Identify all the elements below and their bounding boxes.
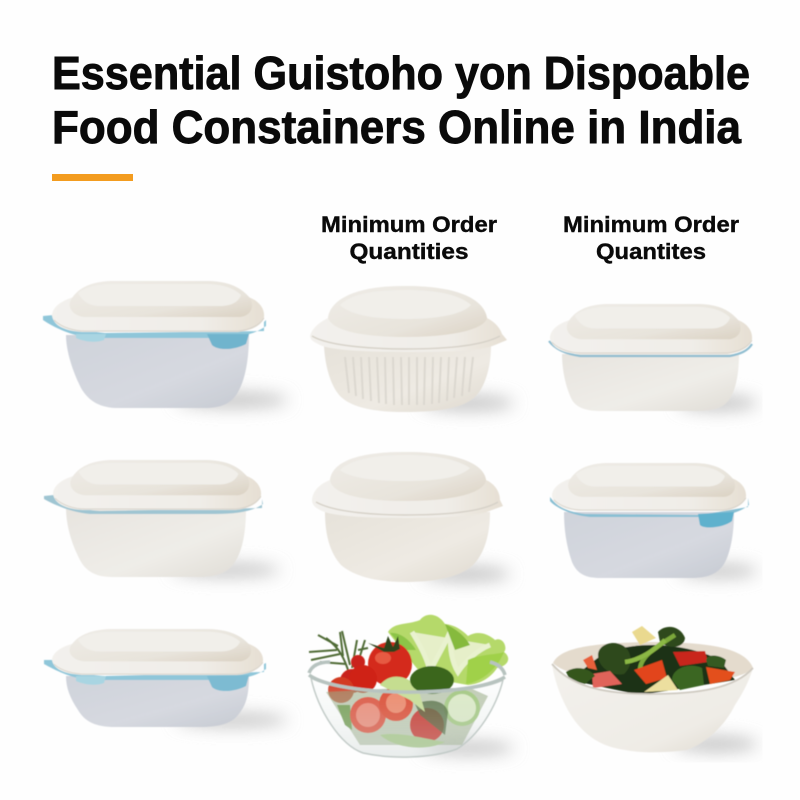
tomatoes bbox=[328, 636, 412, 703]
glass bbox=[311, 678, 503, 757]
lettuce bbox=[388, 615, 508, 685]
title bbox=[52, 47, 750, 153]
glass bowl interior vegetables bbox=[326, 666, 488, 748]
title: Essential Guistoho yon Dispoable bbox=[52, 47, 750, 99]
column heading: minimum order quantities bbox=[321, 212, 497, 264]
column heading: minimum order quantites bbox=[563, 212, 739, 264]
container: row 1 left, grey with blue clips bbox=[43, 281, 288, 408]
container: row 1 right, white with thin blue rim bbox=[549, 304, 758, 411]
container: row 2 left, white bbox=[44, 460, 280, 577]
column heading: minimum order quantities: Quantities bbox=[350, 239, 468, 264]
salad bbox=[566, 626, 735, 695]
column heading: minimum order quantites: Quantites bbox=[596, 239, 706, 264]
container: row 2 centre, round bbox=[312, 452, 510, 582]
glass salad bowl bbox=[309, 615, 514, 757]
title: Food Constainers Online in India bbox=[52, 101, 741, 153]
accent bar bbox=[52, 174, 133, 181]
container: row 1 centre, round ribbed bbox=[310, 286, 514, 412]
container: row 2 right, grey with blue clip bbox=[550, 463, 758, 578]
white salad bowl bbox=[552, 626, 758, 752]
container: row 3 left, grey with blue clips bbox=[44, 629, 288, 727]
rosemary bbox=[309, 631, 368, 673]
column heading: minimum order quantities: Minimum Order bbox=[321, 212, 497, 237]
column heading: minimum order quantites: Minimum Order bbox=[563, 212, 739, 237]
